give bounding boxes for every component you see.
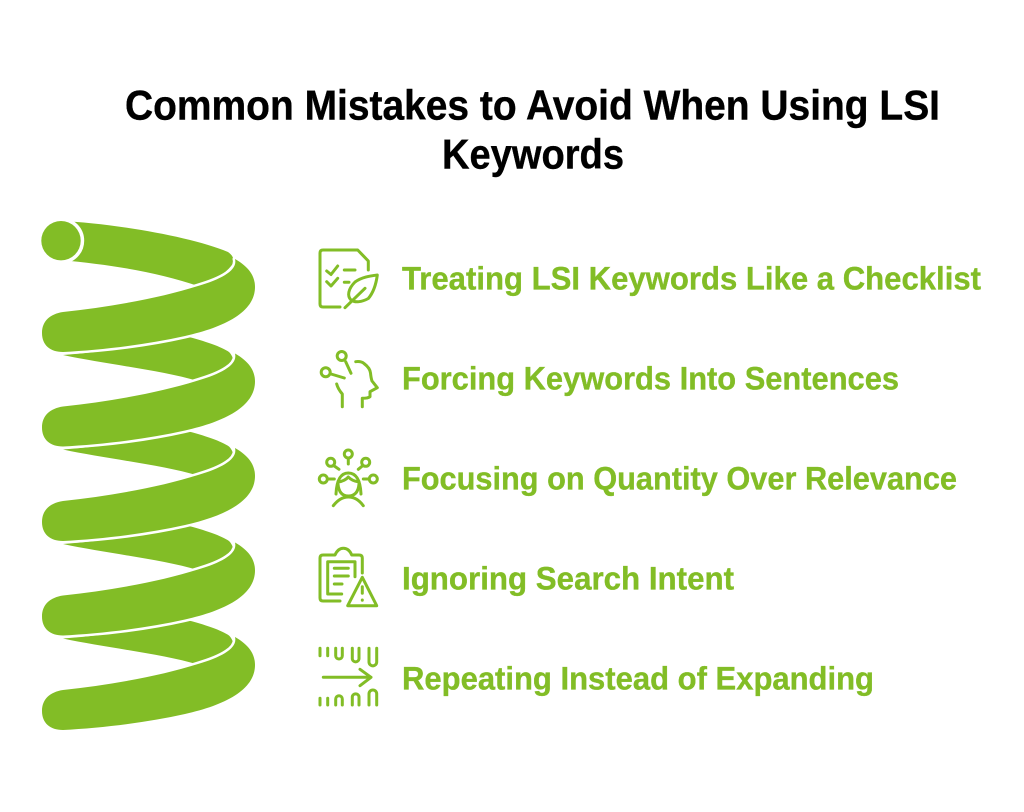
spiral graphic bbox=[41, 221, 255, 730]
icon: clipboard with warning triangle bbox=[320, 548, 377, 606]
label: repeating instead of expanding: Repeating Instead of Expanding bbox=[402, 660, 874, 696]
title: Keywords bbox=[442, 130, 624, 178]
label: ignoring search intent: Ignoring Search Intent bbox=[402, 560, 734, 596]
title bbox=[125, 82, 940, 178]
icon: repeating arrow bbox=[320, 648, 377, 705]
icon: head with nodes bbox=[321, 352, 377, 407]
icon: person with radiating nodes bbox=[319, 450, 377, 506]
icon: checklist and feather bbox=[320, 250, 377, 308]
label: focusing on quantity over relevance: Focusing on Quantity Over Relevance bbox=[402, 460, 957, 496]
label: forcing keywords into sentences: Forcing Keywords Into Sentences bbox=[402, 360, 899, 396]
label: treating keywords like a checklist: Treating LSI Keywords Like a Checklist bbox=[402, 260, 981, 296]
title: Common Mistakes to Avoid When Using LSI bbox=[125, 82, 940, 128]
